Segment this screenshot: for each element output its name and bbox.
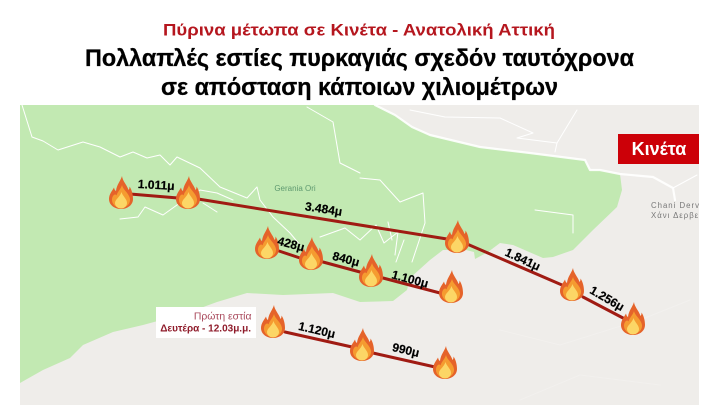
green forest area xyxy=(20,105,622,383)
distance labels: 1.841μ xyxy=(503,245,543,274)
distance lines xyxy=(130,194,623,367)
distance labels: 1.120μ xyxy=(297,319,337,341)
distance labels: 840μ xyxy=(331,249,361,269)
distance labels xyxy=(138,177,627,360)
supertitle: Πύρινα μέτωπα σε Κινέτα - Ανατολική Αττική xyxy=(163,20,555,40)
callout: first fire xyxy=(156,307,256,338)
map label: Chani Derveni: Χάνι Δερβενίου xyxy=(651,211,717,220)
white roads xyxy=(22,105,698,361)
distance labels: 1.011μ xyxy=(138,177,175,193)
map xyxy=(20,105,717,405)
map land background xyxy=(20,105,699,405)
distance labels: 428μ xyxy=(276,234,306,254)
title block xyxy=(85,20,634,101)
distance labels: 3.484μ xyxy=(304,199,343,219)
distance labels: 1.100μ xyxy=(390,268,430,291)
distance labels: 990μ xyxy=(391,340,421,360)
map label: Gerania Ori: Gerania Ori xyxy=(274,184,316,193)
map label: Chani Derveni xyxy=(651,202,699,220)
map label: Chani Derveni: Chani Derveni xyxy=(651,201,713,210)
distance labels: 1.256μ xyxy=(587,283,627,314)
fire icons xyxy=(109,176,645,379)
headline line 2: σε απόσταση κάποιων χιλιομέτρων xyxy=(161,74,558,101)
callout: first fire: Δευτέρα - 12.03μ.μ. xyxy=(160,324,251,334)
callout: first fire: Πρώτη εστία xyxy=(194,310,252,322)
location tag: Kineta xyxy=(618,134,699,164)
location tag: Kineta: Κινέτα xyxy=(632,139,686,159)
headline line 1: Πολλαπλές εστίες πυρκαγιάς σχεδόν ταυτόχρονα xyxy=(85,45,634,72)
